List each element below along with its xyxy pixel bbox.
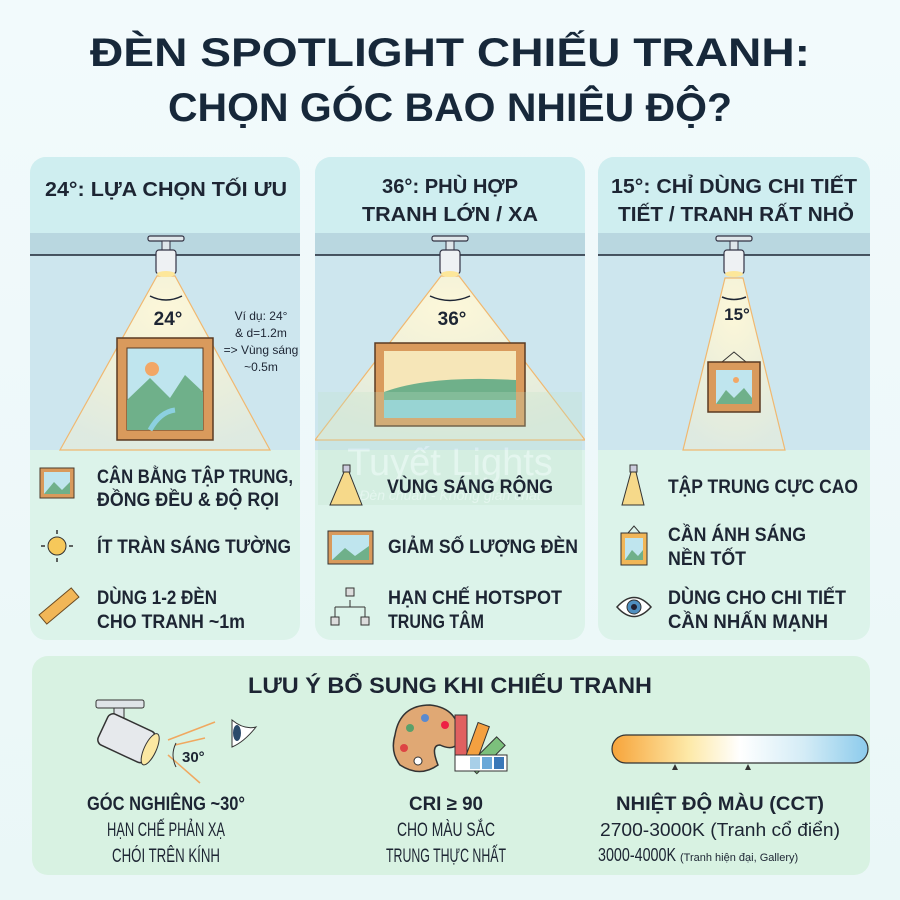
item: background light [621,524,806,570]
heading: notes: LƯU Ý BỔ SUNG KHI CHIẾU TRANH [248,673,652,698]
item: hotspot [331,587,562,633]
text: tilt angle: GÓC NGHIÊNG ~30° [87,793,245,815]
heading: 15: TIẾT / TRANH RẤT NHỎ [618,202,854,226]
heading: 15 [611,174,857,226]
panel: 36 degrees [315,157,585,640]
text: CRI: CRI ≥ 90 [409,794,483,815]
item: ruler [39,587,245,633]
title: CHỌN GÓC BAO NHIÊU ĐỘ? [168,84,732,130]
item: less spill: ÍT TRÀN SÁNG TƯỜNG [97,536,291,558]
item: hotspot: HẠN CHẾ HOTSPOT [388,587,562,609]
text: tilt angle: HẠN CHẾ PHẢN XẠ [107,819,225,841]
icon: spotlight [432,236,468,277]
item: background light: NỀN TỐT [668,548,746,570]
item: wide beam: VÙNG SÁNG RỘNG [387,476,553,498]
item: fewer lamps [328,531,578,564]
watermark: Tuyết Lights [347,442,553,484]
title: ĐÈN SPOTLIGHT CHIẾU TRANH: [90,29,810,75]
icon: palette and swatches [393,705,507,774]
heading: 36 [362,174,538,226]
item: eye: DÙNG CHO CHI TIẾT [668,587,846,609]
text: CCT: NHIỆT ĐỘ MÀU (CCT) [616,793,824,815]
item: eye [617,587,846,633]
icon: tilted spotlight [96,700,256,783]
heading: 36: 36°: PHÙ HỢP [382,174,518,198]
heading: 15: 15°: CHỈ DÙNG CHI TIẾT [611,174,857,198]
painting: landscape [117,338,213,440]
item: focused [622,465,858,505]
item: background light: CẦN ÁNH SÁNG [668,524,806,546]
text: CRI: CHO MÀU SẮC [397,819,495,841]
callout: example: Ví dụ: 24° [235,309,288,323]
title [90,29,810,130]
text: CCT [598,793,840,865]
item: balanced: CÂN BẰNG TẬP TRUNG, [97,466,293,488]
heading: 24: 24°: LỰA CHỌN TỐI ƯU [45,177,287,201]
item: less spill [41,530,291,562]
watermark: Đèn chuẩn - Không gian chất [359,487,542,503]
text: CRI: TRUNG THỰC NHẤT [386,845,506,867]
text: tilt angle: CHÓI TRÊN KÍNH [112,845,220,867]
text: tilt angle [87,793,245,867]
text: CCT: 3000-4000K [598,845,676,865]
painting: wide landscape [375,343,525,426]
watermark [318,392,582,505]
panel: additional notes [32,656,870,875]
chart: color temperature bar [612,735,868,770]
item: fewer lamps: GIẢM SỐ LƯỢNG ĐÈN [388,536,578,558]
light beam [683,278,785,450]
icon: spotlight [148,236,184,277]
item: eye: CẦN NHẤN MẠNH [668,611,828,633]
callout: example: => Vùng sáng [224,343,298,357]
callout: example: & d=1.2m [235,326,287,340]
heading: 36: TRANH LỚN / XA [362,202,538,226]
angle label: 24° [154,309,182,330]
panel: 24 degrees [30,157,300,640]
callout: example: ~0.5m [244,360,278,374]
panel: 36 degrees: 36° [438,309,466,330]
panel: 15 degrees [598,157,870,640]
item: balanced [40,466,293,511]
icon: tilted spotlight: 30° [182,749,205,766]
callout: example [224,309,298,374]
item: ruler: DÙNG 1-2 ĐÈN [97,587,217,609]
light beam [315,276,585,440]
icon: spotlight [716,236,752,277]
item: ruler: CHO TRANH ~1m [97,612,245,633]
text: CCT: (Tranh hiện đại, Gallery) [680,852,798,864]
light beam [60,276,270,450]
text: CRI [386,794,506,867]
item: focused: TẬP TRUNG CỰC CAO [668,476,858,498]
text: CCT: 2700-3000K (Tranh cổ điển) [600,820,840,840]
item: balanced: ĐỒNG ĐỀU & ĐỘ RỌI [97,489,279,511]
panel: 15 degrees: 15° [724,305,750,324]
item: wide beam [330,465,553,505]
painting: small [708,352,760,412]
item: hotspot: TRUNG TÂM [388,611,484,633]
